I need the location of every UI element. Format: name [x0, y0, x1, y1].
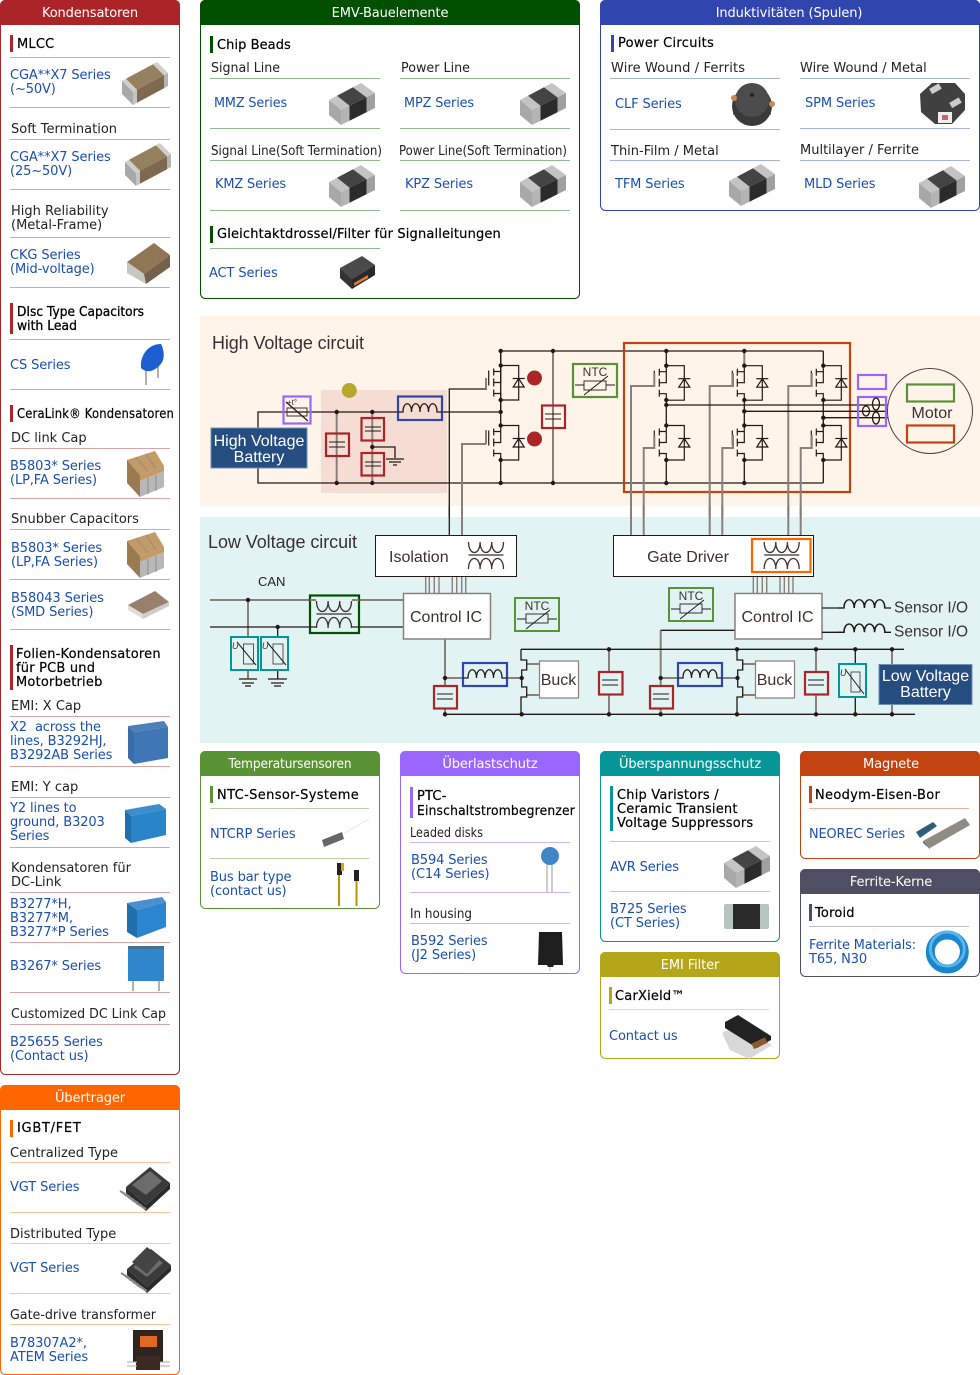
block: Buck right [756, 661, 794, 698]
link: CS Series: CS Series [10, 358, 71, 373]
icon: MOSFET half-bridge [489, 351, 542, 483]
icon: chip bead [520, 165, 566, 207]
icon: chip bead [329, 165, 375, 207]
sub-heading: Multilayer: Multilayer / Ferrite [800, 143, 919, 158]
link: Bus bar: Bus bar type [210, 870, 291, 885]
link: B3267: B3267* Series [10, 959, 101, 974]
icon: CLF inductor [731, 83, 775, 126]
heading: High Voltage circuit: High Voltage circuit [212, 333, 364, 353]
block: Gate Driver: Gate Driver [647, 549, 730, 566]
panel: Magnete: Magnete [863, 757, 919, 772]
panel: Temperatursensoren [200, 751, 380, 908]
label: Sensor I/O: Sensor I/O [894, 624, 968, 640]
wiring [210, 576, 915, 714]
icon: NTC right [669, 588, 713, 621]
sub-heading: Leaded disks: Leaded disks [410, 826, 483, 841]
icon: CarXield filter [722, 1015, 772, 1059]
panel: EMI Filter: EMI Filter [661, 958, 720, 973]
icon: NTC probe [322, 819, 369, 847]
sub-heading: Signal soft: Signal Line(Soft Termination) [211, 144, 382, 159]
icon: ATEM transformer [127, 1330, 170, 1370]
icon: PTC thermistor box [284, 396, 310, 424]
panel: Ferrite-Kerne: Ferrite-Kerne [850, 875, 932, 890]
icon: NTC box: NTC [583, 365, 608, 379]
link: CKG Series: CKG Series [10, 248, 81, 263]
panel header: Übertrager [0, 1085, 180, 1110]
link: Contact us: Contact us [609, 1029, 678, 1044]
panel header: Überlastschutz [400, 751, 580, 776]
link: B725: (CT Series) [610, 916, 680, 931]
heading: Neodym: Neodym-Eisen-Bor [815, 788, 940, 803]
sub-heading: Customized DC Link: Customized DC Link Cap [11, 1007, 166, 1022]
panel: Kondensatoren [0, 0, 180, 1074]
heading: Chip Beads: Chip Beads [217, 38, 291, 53]
heading: PTC [417, 789, 575, 819]
link: B725: B725 Series [610, 902, 687, 917]
heading: CarXield: CarXield™ [615, 989, 685, 1004]
icon: CT varistor [724, 904, 769, 929]
icon: CeraLink module [127, 532, 164, 578]
block: Isolation: Isolation [389, 549, 449, 566]
icon: inductor box [398, 396, 442, 420]
link: KMZ: KMZ Series [215, 177, 286, 192]
link: T65, N30: T65, N30 [808, 952, 867, 967]
icon: MLCC chip [125, 143, 171, 186]
icon: MLD chip [919, 166, 965, 208]
icon: varistor right: U [840, 668, 847, 678]
panel: EMV-Bauelemente [200, 0, 580, 298]
panel: Low Voltage circuit [200, 506, 980, 743]
sub-heading: In housing: In housing [410, 907, 472, 922]
link: B78307A2: B78307A2*, [10, 1336, 87, 1351]
link: KPZ: KPZ Series [405, 177, 473, 192]
sub-heading: Power Line: Power Line [401, 61, 470, 76]
heading: Chip Varistors: Chip Varistors / [617, 788, 719, 803]
icon: NTC box [573, 364, 617, 397]
panel: Temperatursensoren: Temperatursensoren [228, 757, 352, 772]
heading: Disc Type Capacitors [17, 305, 144, 334]
panel: Übertrager [0, 1085, 180, 1374]
block: Buck left: Buck [541, 672, 577, 689]
link: NEOREC: NEOREC Series [809, 827, 905, 842]
link: B592: (J2 Series) [411, 948, 476, 963]
icon: chip bead [329, 83, 375, 125]
link: X2: X2 across the [10, 720, 101, 735]
link: Y2: Series [10, 829, 50, 844]
heading: PTC: Einschaltstrombegrenzer [417, 804, 575, 819]
link: Bus bar: (contact us) [210, 884, 286, 899]
link: B5803 snubber: (LP,FA Series) [11, 555, 98, 570]
link: VGT Series: VGT Series [10, 1261, 80, 1276]
link: B58043: (SMD Series) [11, 605, 93, 620]
battery: Low Voltage: Low Voltage [882, 668, 969, 685]
heading: NTC-Sensor-Systeme: NTC-Sensor-Systeme [217, 788, 359, 803]
link: B592: B592 Series [411, 934, 488, 949]
link: B78307A2: ATEM Series [10, 1350, 88, 1365]
icon: CeraLink module [127, 451, 164, 497]
link: B594: B594 Series [411, 853, 488, 868]
sub-heading: EMI Y cap: EMI: Y cap [11, 780, 78, 795]
icon: low-voltage inductor left [463, 663, 507, 686]
heading: MLCC: MLCC [17, 37, 54, 52]
heading: Folien-Kondensatoren: für PCB und [16, 661, 95, 676]
heading: Power Circuits: Power Circuits [618, 36, 714, 51]
inverter IGBT bridge [624, 343, 899, 535]
link: TFM: TFM Series [614, 177, 685, 192]
icon: MLCC chip [122, 62, 168, 105]
sub-heading: Wire Wound Ferrits: Wire Wound / Ferrits [611, 61, 745, 76]
link: X2: B3292AB Series [10, 748, 113, 763]
icon: VGT transformer [120, 1167, 170, 1211]
heading: Gleichtaktdrossel: Gleichtaktdrossel/Filter für Signalleitungen [217, 227, 501, 242]
icon: varistors: U [232, 641, 239, 651]
icon: varistors: U [262, 641, 269, 651]
junction dots [246, 598, 894, 716]
heading: CeraLink: CeraLink® Kondensatoren [17, 407, 174, 422]
link: Y2: Y2 lines to [10, 801, 76, 816]
heading: Folien-Kondensatoren: Motorbetrieb [16, 675, 103, 690]
panel: Magnete [800, 751, 980, 858]
sub-heading: Centralized Type: Centralized Type [10, 1146, 118, 1161]
link: CKG Series: (Mid-voltage) [10, 262, 95, 277]
panel: Überspannungsschutz [600, 751, 780, 942]
icon: PTC thermistor box: +t° [287, 398, 297, 407]
icon: B3277 cap [127, 897, 166, 938]
icon: magnets [916, 818, 970, 849]
icon: toroid [930, 932, 964, 969]
battery: Low Voltage [879, 664, 972, 704]
heading: Disc Type Capacitors: with Lead [17, 319, 77, 334]
link: X2: lines, B3292HJ, [10, 734, 106, 749]
block: Buck right: Buck [757, 672, 793, 689]
heading: PTC: PTC- [417, 789, 447, 804]
icon: TFM chip [729, 164, 775, 206]
panel header: Kondensatoren [0, 0, 180, 25]
block: Control IC left [404, 594, 490, 639]
panel: Übertrager: Übertrager [55, 1089, 126, 1106]
sub-heading: DC-Link: DC-Link [11, 875, 62, 890]
sub-heading: Signal Line: Signal Line [211, 61, 280, 76]
panel header: Überspannungsschutz [600, 751, 780, 776]
sub-heading: Thin-Film: Thin-Film / Metal [610, 144, 719, 159]
motor: Motor [912, 405, 953, 422]
link: B3277: B3277*M, [10, 911, 73, 926]
link: CGA X7 50V: CGA**X7 Series [10, 68, 111, 83]
icon: B3267 cap [128, 946, 164, 991]
sub-heading: DC link Cap: DC link Cap [11, 431, 87, 446]
sensor inductors [822, 600, 891, 632]
sub-heading: High Reliability: High Reliability [11, 204, 109, 219]
link: B5803: B5803* Series [10, 459, 101, 474]
filter zone [321, 390, 447, 493]
icon: low-voltage inductor right [678, 663, 722, 686]
heading: Low Voltage circuit: Low Voltage circuit [208, 532, 357, 552]
block: Control IC left: Control IC [410, 609, 482, 626]
icon: blue disc capacitor [141, 344, 164, 385]
icon: low-voltage capacitors [434, 672, 828, 708]
panel: High Voltage circuit [200, 316, 980, 535]
link: B3277: B3277*P Series [10, 925, 109, 940]
panel: Kondensatoren: Kondensatoren [42, 6, 138, 21]
icon: black housing [538, 932, 563, 971]
panel header: EMV-Bauelemente [200, 0, 580, 25]
battery: High Voltage [211, 428, 307, 468]
heading: Folien-Kondensatoren: Folien-Kondensatoren [16, 647, 161, 662]
sub-heading: DC-Link: Kondensatoren für [11, 861, 131, 876]
panel header: Temperatursensoren [200, 751, 380, 776]
block: Control IC right: Control IC [741, 609, 814, 626]
panel: Überlastschutz [400, 751, 580, 974]
icon: varistors [231, 637, 288, 670]
icon: Y cap [125, 804, 166, 843]
link: CLF: CLF Series [615, 97, 682, 112]
battery: Low Voltage: Battery [900, 684, 951, 701]
link: ACT: ACT Series [209, 266, 278, 281]
icon: ACT choke [340, 256, 375, 289]
link: B3277: B3277*H, [10, 897, 71, 912]
icon: current sensor boxes [858, 375, 886, 426]
panel: Ferrite-Kerne [800, 869, 980, 976]
panel: EMV-Bauelemente: EMV-Bauelemente [332, 6, 448, 21]
link: Ferrite Materials: Ferrite Materials: [809, 938, 916, 953]
link: B25655: (Contact us) [10, 1049, 88, 1064]
link: MLD: MLD Series [804, 177, 876, 192]
icon: metal-frame capacitor [127, 243, 170, 284]
label: Sensor I/O: Sensor I/O [894, 600, 968, 616]
sub-heading: Snubber Capacitors: Snubber Capacitors [11, 512, 139, 527]
panel: Überlastschutz: Überlastschutz [442, 755, 538, 772]
block: Gate Driver [614, 536, 814, 576]
link: B5803 snubber: B5803* Series [11, 541, 102, 556]
junction dots [334, 349, 555, 485]
sub-heading: Wire Wound Metal: Wire Wound / Metal [800, 61, 927, 76]
link: SPM: SPM Series [805, 96, 876, 111]
icon: NTC left [515, 598, 559, 631]
sub-heading: Power soft: Power Line(Soft Termination) [399, 144, 567, 159]
link: CGA X7 25-50V: CGA**X7 Series [10, 150, 111, 165]
heading: Toroid: Toroid [814, 906, 855, 921]
link: MPZ: MPZ Series [404, 96, 474, 111]
icon: bus bar sensors [337, 863, 359, 906]
block: Buck left [540, 661, 578, 698]
icon: chip varistor [724, 846, 770, 888]
panel header: Magnete [800, 751, 980, 776]
sub-heading: Soft Termination: Soft Termination [11, 122, 117, 137]
heading: IGBT/FET: IGBT/FET [17, 1121, 81, 1136]
icon: SMD capacitor [128, 591, 169, 619]
gate lines [449, 506, 801, 535]
heading: Chip Varistors: Voltage Suppressors [617, 816, 753, 831]
panel header: Ferrite-Kerne [800, 869, 980, 894]
panel: Überspannungsschutz: Überspannungsschutz [619, 755, 761, 772]
link: MMZ: MMZ Series [214, 96, 287, 111]
block: Control IC right [735, 594, 822, 639]
icon: NTC right: NTC [679, 589, 704, 603]
icon: X cap [128, 721, 168, 764]
motor [888, 368, 972, 454]
battery: High Voltage: High Voltage [214, 433, 304, 450]
link: B5803: (LP,FA Series) [10, 473, 97, 488]
sub-heading: EMI X Cap: EMI: X Cap [11, 699, 81, 714]
icon: SPM inductor [920, 83, 965, 124]
link: CGA X7 25-50V: (25~50V) [10, 164, 72, 179]
heading: Chip Varistors: Ceramic Transient [617, 802, 738, 817]
link: VGT Series: VGT Series [10, 1180, 80, 1195]
link: Y2: ground, B3203 [10, 815, 105, 830]
panel: EMI Filter [600, 952, 780, 1059]
panel: Induktivitäten: Induktivitäten (Spulen) [716, 6, 862, 21]
heading: Disc Type Capacitors: DIsc Type Capacitors [17, 305, 144, 320]
icon: blue disk [541, 847, 559, 892]
sub-heading: Distributed Type: Distributed Type [10, 1227, 116, 1242]
icon: VGT transformer [121, 1247, 171, 1293]
icon: chip bead [520, 83, 566, 125]
link: B58043: B58043 Series [11, 591, 104, 606]
link: B25655: B25655 Series [10, 1035, 103, 1050]
link: NTCRP: NTCRP Series [210, 827, 296, 842]
panel header: EMI Filter [600, 952, 780, 977]
link: B594: (C14 Series) [411, 867, 489, 882]
link: AVR: AVR Series [610, 860, 679, 875]
sub-heading: High Reliability: (Metal-Frame) [11, 218, 102, 233]
sub-heading: Gate-drive transformer: Gate-drive transformer [10, 1308, 157, 1323]
link: CGA X7 50V: (~50V) [10, 82, 56, 97]
icon: common mode choke box [310, 596, 359, 633]
icon: NTC left: NTC [525, 599, 550, 613]
block: Isolation [376, 536, 516, 576]
panel header: Induktivitäten [600, 0, 980, 25]
wiring [258, 351, 823, 535]
icon: capacitors with red boxes [326, 406, 565, 476]
icon: varistor right [839, 664, 866, 697]
panel: Induktivitäten [600, 0, 980, 210]
icon: olive dot [342, 383, 357, 398]
label: CAN: CAN [258, 574, 285, 589]
battery: High Voltage: Battery [234, 449, 284, 466]
